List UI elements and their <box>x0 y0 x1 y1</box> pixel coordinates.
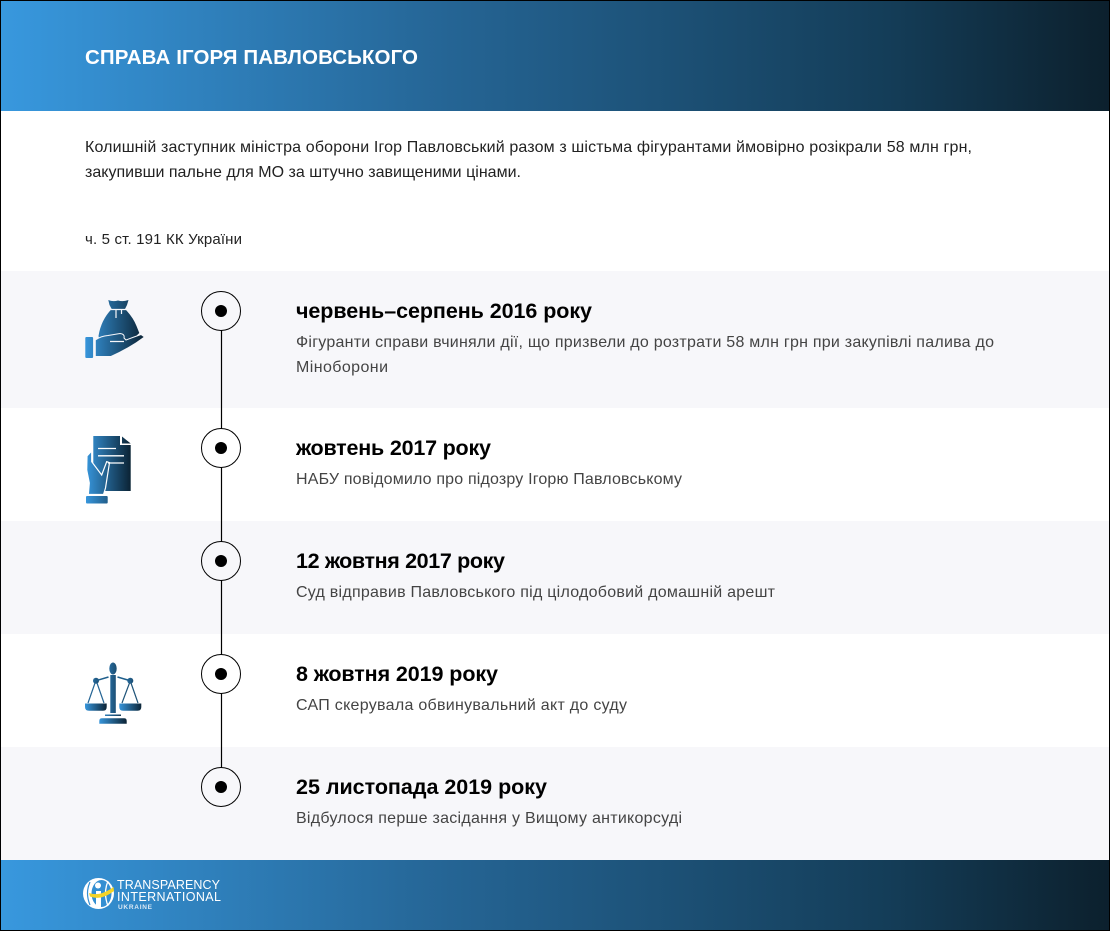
legal article reference: ч. 5 ст. 191 КК України <box>85 231 242 248</box>
timeline entry 4 <box>296 662 627 714</box>
icon: scales of justice <box>85 662 141 724</box>
timeline entry 2: НАБУ повідомило про підозру Ігорю Павловському <box>296 471 682 488</box>
timeline marker 4 <box>202 654 240 694</box>
timeline entry 3: Суд відправив Павловського під цілодобовий домашній арешт <box>296 584 776 601</box>
timeline entry 3 <box>296 549 776 601</box>
title: СПРАВА ІГОРЯ ПАВЛОВСЬКОГО <box>85 46 418 69</box>
timeline marker 3 <box>202 542 240 580</box>
timeline entry 1: Фігуранти справи вчиняли дії, що призвели до розтрати 58 млн грн при закупівлі палива до <box>296 334 994 351</box>
logo: Transparency International Ukraine: UKRAINE <box>118 904 153 911</box>
timeline marker 2 <box>202 428 240 468</box>
timeline entry 5: 25 листопада 2019 року <box>296 775 547 799</box>
timeline entry 1 <box>296 299 994 376</box>
footer banner <box>1 860 1109 930</box>
timeline entry 4: 8 жовтня 2019 року <box>296 662 498 686</box>
timeline entry 5 <box>296 775 682 827</box>
panel: row backgrounds <box>1 271 1109 860</box>
timeline line <box>220 311 222 787</box>
timeline marker 1 <box>202 292 240 330</box>
logo: Transparency International Ukraine: TRANSPARENCY <box>117 878 221 892</box>
timeline entry 1: червень–серпень 2016 року <box>296 299 592 323</box>
timeline entry 2: жовтень 2017 року <box>295 436 491 460</box>
timeline entry 3: 12 жовтня 2017 року <box>296 549 505 573</box>
timeline marker 5 <box>202 768 240 806</box>
header banner <box>1 1 1109 111</box>
icon: hand holding document <box>86 436 131 504</box>
timeline entry 1: Міноборони <box>296 359 388 376</box>
logo: Transparency International Ukraine <box>83 878 221 911</box>
intro text: закупивши пальне для МО за штучно завищеними цінами. <box>85 164 521 181</box>
timeline entry 2 <box>295 436 682 488</box>
timeline entry 4: САП скерувала обвинувальний акт до суду <box>296 697 627 714</box>
icon: money bag in hand <box>85 300 144 358</box>
intro text: Колишній заступник міністра оборони Ігор Павловський разом з шістьма фігурантами ймовірно розікрали 58 млн грн, <box>85 139 972 156</box>
intro text <box>85 139 972 181</box>
timeline entry 5: Відбулося перше засідання у Вищому антикорсуді <box>296 810 682 827</box>
logo: Transparency International Ukraine: INTERNATIONAL <box>117 890 221 904</box>
